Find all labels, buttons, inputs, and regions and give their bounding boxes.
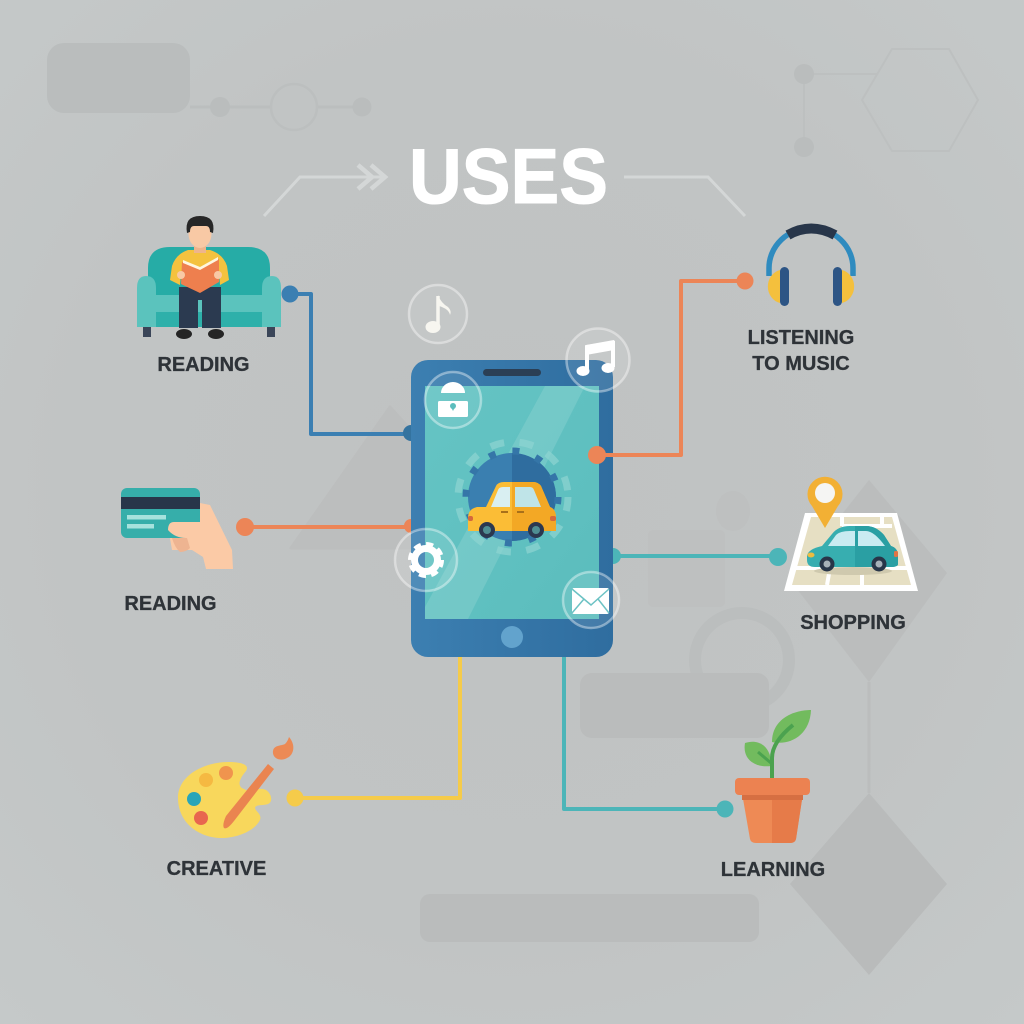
- dashed ring: [458, 442, 568, 552]
- palette: [178, 762, 271, 838]
- thumb: [168, 522, 205, 538]
- map: [784, 513, 918, 591]
- label: learning: LEARNING: [721, 859, 825, 881]
- connector: music (orange): [588, 272, 754, 464]
- lower finger: [172, 538, 190, 552]
- brush tip: [273, 737, 293, 760]
- label: reading 2: READING: [124, 593, 217, 615]
- label: listening to music: TO MUSIC: [752, 353, 850, 375]
- car: [468, 482, 556, 538]
- bubble: double note: [566, 328, 630, 392]
- card: [121, 488, 233, 569]
- screen: [425, 386, 599, 619]
- gear: [466, 451, 558, 543]
- icon: potted plant: [735, 710, 811, 843]
- icon: palette and brush: [178, 737, 293, 838]
- person: [170, 216, 229, 339]
- leaves: [745, 710, 811, 779]
- label: creative: CREATIVE: [167, 858, 266, 880]
- paint dots: [187, 766, 233, 825]
- title: USES: [409, 132, 608, 220]
- speaker: [483, 369, 541, 376]
- screen glare: [425, 386, 585, 619]
- bubble: lock: [425, 372, 481, 428]
- bubble: music note: [409, 285, 467, 343]
- title arrow: right: [624, 177, 745, 216]
- connector: teal shopping: [605, 548, 787, 566]
- tablet body: [411, 360, 613, 657]
- central gear and car: [458, 442, 568, 552]
- connector: reading (blue): [282, 286, 419, 441]
- icon: map with car and pin: [784, 477, 918, 591]
- location pin: [808, 477, 843, 528]
- sofa: [137, 247, 281, 337]
- icon: man reading on sofa: [137, 216, 281, 339]
- tablet: [411, 360, 613, 657]
- home button: [501, 626, 523, 648]
- bubble: gear: [395, 529, 457, 591]
- connector: card (orange): [236, 518, 418, 536]
- brush handle: [223, 764, 274, 828]
- label: listening to music: LISTENING: [748, 327, 854, 349]
- label: shopping: SHOPPING: [800, 612, 906, 634]
- connector: creative (yellow): [286, 655, 460, 806]
- icon: headphones: [768, 228, 854, 306]
- car: [807, 526, 898, 575]
- label: reading: READING: [157, 354, 250, 376]
- pot: [735, 778, 810, 843]
- bubble: mail: [563, 572, 619, 628]
- connector: learning (teal): [564, 655, 734, 818]
- icon: credit card in hand: [121, 488, 233, 569]
- title arrow: left: [264, 165, 385, 216]
